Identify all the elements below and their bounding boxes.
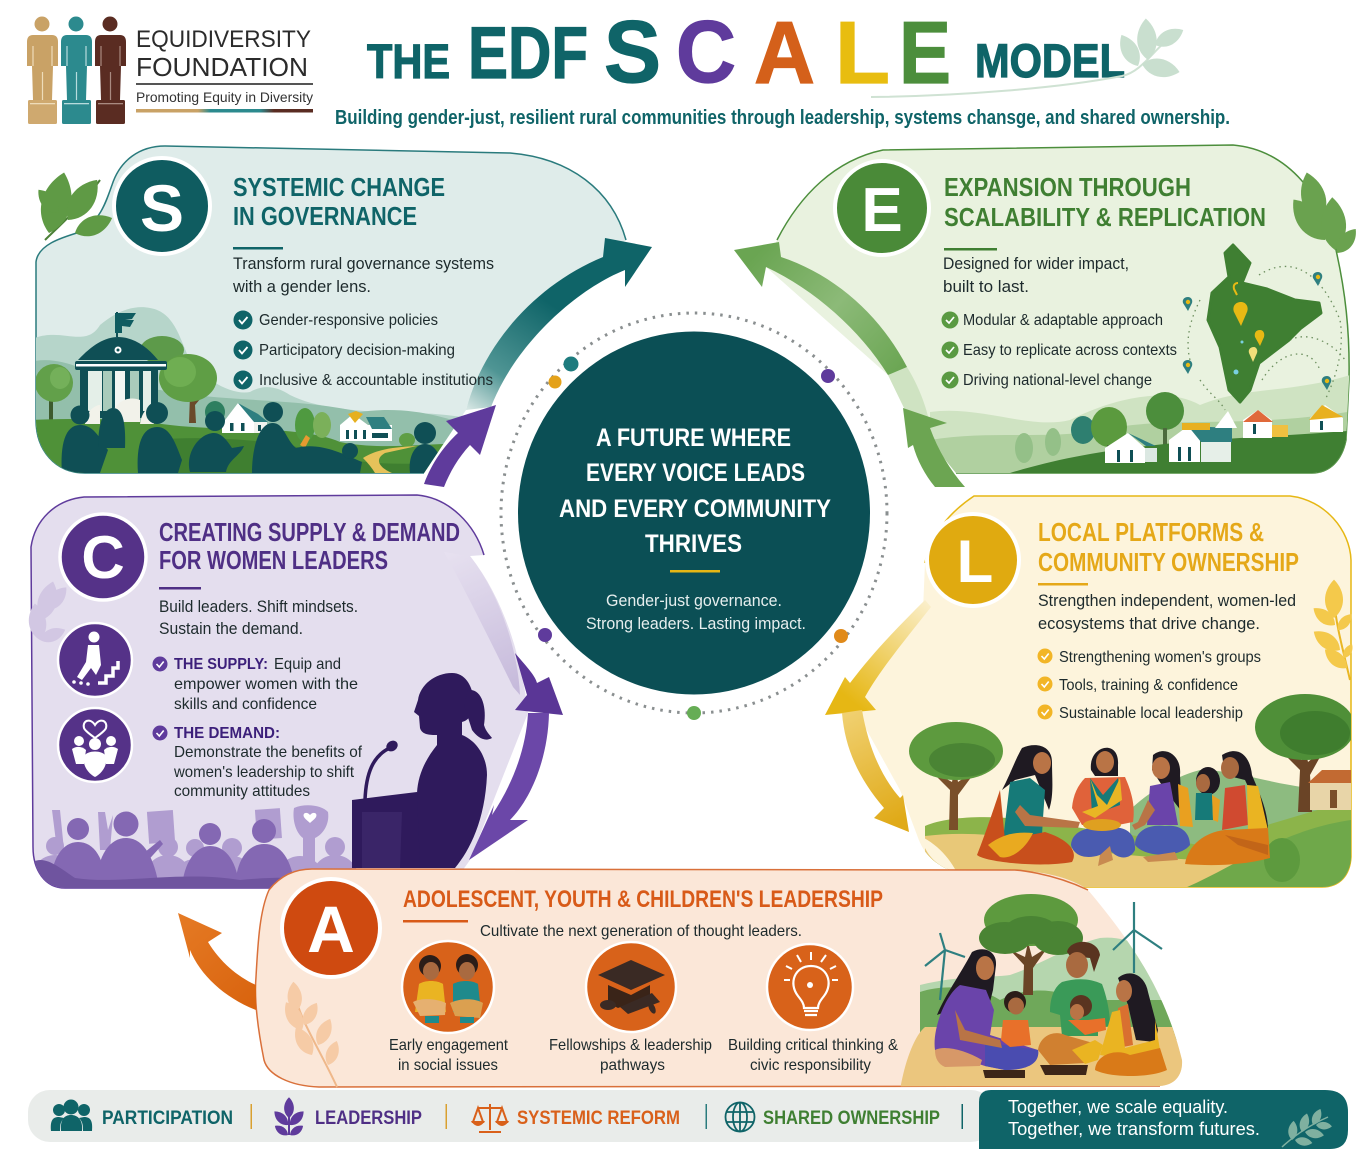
title <box>367 2 1125 102</box>
hut <box>1308 770 1351 810</box>
footer strip <box>28 1090 993 1142</box>
list: E bullets: Modular & adaptable approach <box>963 312 1163 329</box>
title: C <box>676 2 736 101</box>
icon: graduation cap <box>586 942 676 1032</box>
icon: title sprig <box>871 18 1187 97</box>
tree: left <box>909 722 1003 830</box>
icon: E sprig <box>1284 169 1361 257</box>
icon: light bulb <box>767 944 853 1030</box>
figure: child right <box>1068 995 1106 1064</box>
list: L bullets: Tools, training & confidence <box>1059 677 1238 694</box>
arrow: C to S (purple) <box>424 405 496 487</box>
badge: E: E <box>861 176 903 245</box>
badge: C: C <box>81 524 125 591</box>
heading: E <box>944 172 1266 232</box>
illustration: hills and villages <box>930 375 1350 473</box>
text: C description: Build leaders. Shift mindsets. <box>159 597 358 616</box>
panel: A adolescent youth and children's leadership <box>255 869 1200 1090</box>
arrow: A to C (orange) <box>178 913 256 1010</box>
caption: critical thinking <box>728 1037 898 1074</box>
figure: woman right <box>1095 973 1167 1076</box>
logo: Equidiversity Foundation <box>27 16 313 124</box>
caption: early engagement <box>389 1037 509 1074</box>
heading: S: SYSTEMIC CHANGE <box>233 172 445 202</box>
icon: community and heart <box>58 708 132 782</box>
arrow: L upper (yellow) <box>825 600 931 715</box>
crowd front row <box>54 812 292 880</box>
heading: A: ADOLESCENT, YOUTH & CHILDREN'S LEADERSHIP <box>403 886 883 913</box>
caption: critical thinking: Building critical thinking & <box>728 1037 898 1054</box>
icon: leadership sprig <box>271 1097 307 1138</box>
icon: S sprig <box>33 169 116 242</box>
text: the demand: Demonstrate the benefits of <box>174 744 363 761</box>
map: India with pins <box>1183 245 1345 410</box>
text: L description: ecosystems that drive change. <box>1038 614 1260 633</box>
heading: E: EXPANSION THROUGH <box>944 172 1191 202</box>
crowd back row <box>36 805 356 888</box>
text: the supply: Equip and <box>274 656 341 673</box>
text: S description: with a gender lens. <box>232 277 371 296</box>
building: government <box>75 312 167 424</box>
text: the supply: skills and confidence <box>174 696 317 713</box>
arrow: S to E direction (teal) <box>466 238 652 410</box>
figure: woman 1 <box>977 745 1080 864</box>
illustration: family under a tree <box>900 938 1200 1090</box>
text: E description: Designed for wider impact, <box>943 254 1129 273</box>
text: C description <box>159 597 358 638</box>
panel: L local platforms <box>850 496 1355 890</box>
figure: woman 4 <box>1185 751 1270 865</box>
logo: Equidiversity Foundation: FOUNDATION <box>136 52 308 82</box>
arrow: E lower (green) <box>903 408 965 487</box>
text: the demand: community attitudes <box>174 783 310 800</box>
houses <box>1105 405 1343 463</box>
center heading: AND EVERY COMMUNITY <box>559 495 831 523</box>
badge: E <box>835 161 929 255</box>
callout: together we scale equality: Together, we scale equality. <box>1008 1097 1228 1117</box>
heading: L <box>1038 517 1299 577</box>
badge: A <box>282 879 380 977</box>
label: shared ownership: SHARED OWNERSHIP <box>763 1108 940 1129</box>
caption: fellowships: Fellowships & leadership <box>549 1037 712 1054</box>
text: S description: Transform rural governance systems <box>233 254 494 273</box>
heading: C: CREATING SUPPLY & DEMAND <box>159 517 460 547</box>
panel: S systemic change <box>30 146 626 480</box>
tree: family scene <box>979 894 1083 995</box>
title: MODEL <box>975 34 1125 87</box>
icon: three figures on pedestals <box>27 16 126 124</box>
text: S description <box>232 254 494 296</box>
caption: early engagement: in social issues <box>398 1057 498 1074</box>
badge: S: S <box>140 171 184 245</box>
logo: Equidiversity Foundation: Promoting Equity in Diversity <box>136 89 313 105</box>
icon: globe <box>726 1102 754 1132</box>
badge: A: A <box>307 892 355 966</box>
dots on ring <box>538 356 848 720</box>
list: E bullets: Easy to replicate across contexts <box>963 342 1177 359</box>
figure: child left <box>1001 991 1031 1047</box>
text: the demand: women's leadership to shift <box>173 764 355 781</box>
center heading: A FUTURE WHERE <box>596 424 791 452</box>
illustration: woman speaking at podium <box>352 673 492 868</box>
caption: early engagement: Early engagement <box>389 1037 509 1054</box>
list: E bullets <box>942 312 1177 389</box>
arrow: E upper (green) <box>734 242 930 425</box>
illustration: women's circle under trees <box>909 694 1355 890</box>
list: L bullets <box>1038 648 1261 722</box>
icon: C sprig <box>26 579 72 646</box>
arrow: C lower (purple) <box>444 552 563 860</box>
icon: A sprig <box>280 981 342 1087</box>
label: participation: PARTICIPATION <box>102 1108 233 1129</box>
illustration: crowd silhouette <box>34 805 356 888</box>
heading: L: COMMUNITY OWNERSHIP <box>1038 547 1299 577</box>
center glow <box>482 295 906 731</box>
icon: L sprig <box>1309 580 1355 680</box>
heading: C: FOR WOMEN LEADERS <box>159 545 388 575</box>
figure: child <box>1195 767 1220 822</box>
text: E description <box>943 254 1129 296</box>
center subtext <box>586 592 806 633</box>
heading: L: LOCAL PLATFORMS & <box>1038 517 1264 547</box>
tree: left <box>35 364 73 423</box>
text: E description: built to last. <box>943 277 1029 296</box>
panel: E expansion <box>766 145 1361 480</box>
tree: right of building <box>159 354 217 423</box>
text: A description: Cultivate the next generation of thought leaders. <box>480 923 802 940</box>
silhouettes: community <box>62 402 444 473</box>
label: systemic reform: SYSTEMIC REFORM <box>517 1108 680 1129</box>
icon: footer sprig <box>1282 1107 1332 1147</box>
title: A <box>754 3 815 102</box>
badge: C <box>60 514 146 600</box>
caption: fellowships <box>549 1037 712 1074</box>
arrow: L lower (yellow) <box>842 710 909 832</box>
text: L description <box>1038 591 1296 633</box>
callout: together we scale equality: Together, we transform futures. <box>1008 1119 1260 1139</box>
label: leadership: LEADERSHIP <box>315 1108 422 1129</box>
heading: C <box>159 517 460 575</box>
caption: critical thinking: civic responsibility <box>750 1057 871 1074</box>
icon: wind turbines <box>925 902 1162 1000</box>
house: right <box>340 411 392 441</box>
text: the supply <box>152 656 358 713</box>
text: C description: Sustain the demand. <box>159 619 303 638</box>
center circle: vision statement <box>501 313 887 720</box>
center heading <box>559 424 831 558</box>
text: L description: Strengthen independent, women-led <box>1038 591 1296 610</box>
figure: father <box>1038 942 1110 1075</box>
title: THE <box>367 36 450 89</box>
list: L bullets: Sustainable local leadership <box>1059 705 1243 722</box>
figure: woman 2 <box>1071 748 1135 866</box>
icon: woman climbing stairs <box>58 623 132 697</box>
title: S <box>604 2 661 101</box>
title: L <box>835 3 890 102</box>
tree: right <box>1255 694 1355 812</box>
center heading: EVERY VOICE LEADS <box>586 459 805 487</box>
list: L bullets: Strengthening women's groups <box>1059 649 1261 666</box>
illustration: village and community silhouettes <box>30 307 480 480</box>
icon: children reading <box>402 941 494 1033</box>
figure: mother <box>935 949 1038 1078</box>
figure: woman 3 <box>1132 751 1193 862</box>
text: the supply: THE SUPPLY: <box>174 656 268 673</box>
text: the demand: THE DEMAND: <box>174 725 280 742</box>
list: S bullets: Participatory decision-making <box>259 342 455 359</box>
logo: Equidiversity Foundation: EQUIDIVERSITY <box>136 26 311 53</box>
list: E bullets: Driving national-level change <box>963 372 1152 389</box>
list: S bullets: Inclusive & accountable institutions <box>259 372 493 389</box>
badge: L <box>927 514 1019 606</box>
title: EDF <box>468 13 588 94</box>
list: S bullets <box>234 310 493 390</box>
badge: L: L <box>957 528 993 595</box>
subtitle: Building gender-just, resilient rural communities through leadership, systems chansge, and shared ownership. <box>335 107 1230 129</box>
panel: C creating supply and demand <box>26 495 528 911</box>
heading: S <box>233 172 445 231</box>
house: left <box>222 403 268 433</box>
title: E <box>899 3 951 102</box>
icon: scales <box>473 1104 507 1132</box>
center subtext: Strong leaders. Lasting impact. <box>586 615 806 633</box>
callout: together we scale equality <box>979 1090 1348 1149</box>
heading: S: IN GOVERNANCE <box>233 201 417 231</box>
list: S bullets: Gender-responsive policies <box>259 312 438 329</box>
center subtext: Gender-just governance. <box>606 592 782 610</box>
text: the demand <box>152 725 363 800</box>
text: the supply: empower women with the <box>174 676 358 693</box>
icon: participation people <box>51 1100 92 1131</box>
caption: fellowships: pathways <box>600 1057 665 1074</box>
heading: E: SCALABILITY & REPLICATION <box>944 202 1266 232</box>
badge: S <box>114 158 210 254</box>
center heading: THRIVES <box>645 530 742 558</box>
